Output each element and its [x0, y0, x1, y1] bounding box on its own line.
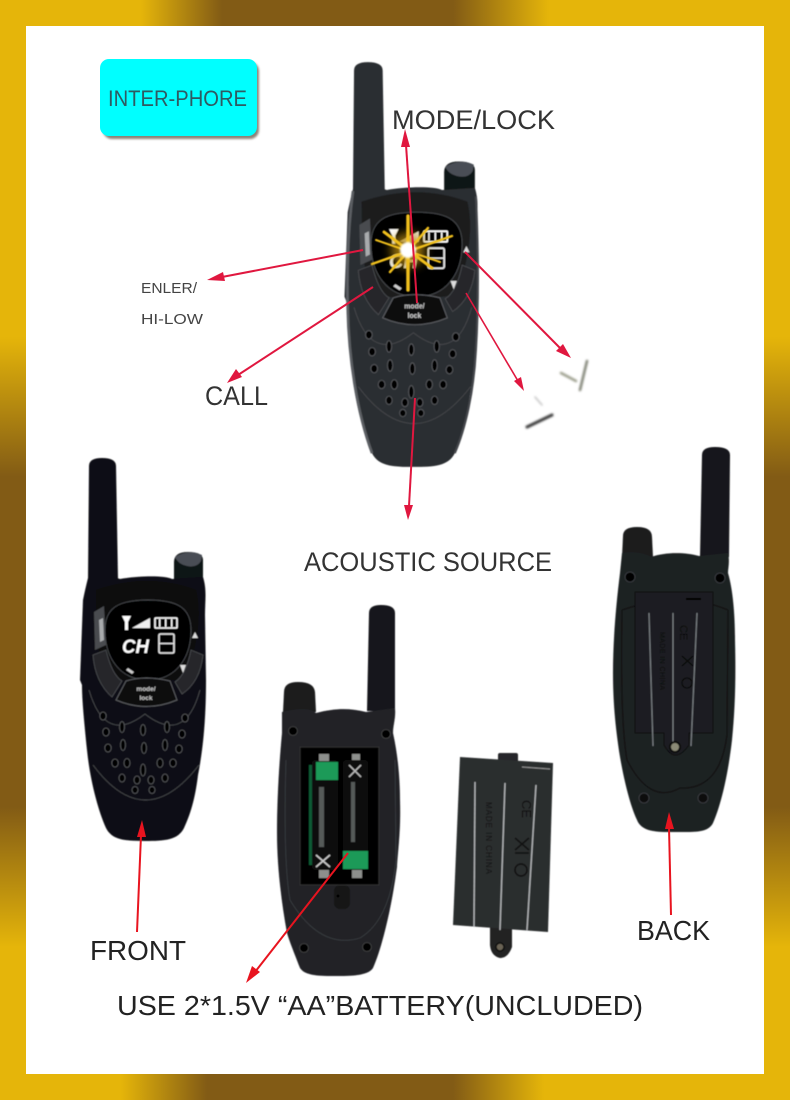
walkie-talkie: lower-left front view — [80, 458, 206, 841]
arrow: to ENLER/HI-LOW — [207, 250, 363, 281]
walkie-talkie: back view: CE — [677, 625, 689, 640]
battery compartment — [300, 747, 379, 885]
arrow: to battery — [246, 853, 348, 983]
arrow: to upper-right button label — [465, 252, 571, 358]
arrow: to CALL — [227, 287, 373, 383]
erased label remnants — [527, 361, 587, 427]
walkie-talkie: open battery compartment view — [277, 605, 400, 976]
label: ENLER/HI-LOW: HI-LOW — [141, 311, 204, 328]
label: battery note: USE 2*1.5V “AA”BATTERY(UNCLUDED) — [117, 990, 643, 1021]
walkie-talkie: back view: MADE IN CHINA — [658, 632, 665, 690]
walkie-talkie: top front view with callouts: mode/ — [404, 303, 425, 310]
arrow: to MODE/LOCK — [401, 129, 417, 303]
walkie-talkie: lower-left front view: lock — [139, 695, 153, 702]
badge: INTER-PHORE: INTER-PHORE — [108, 86, 247, 111]
label: CALL: CALL — [205, 381, 268, 411]
arrow: to lower-right button label — [466, 293, 524, 391]
arrow: to FRONT — [137, 820, 146, 932]
badge: INTER-PHORE — [100, 59, 259, 139]
label: BACK: BACK — [637, 915, 710, 946]
battery door: CE — [519, 800, 534, 818]
battery door — [453, 753, 553, 958]
walkie-talkie: top front view with callouts: CH — [389, 251, 418, 273]
walkie-talkie: back view — [613, 447, 735, 832]
walkie-talkie: lower-left front view: CH — [122, 637, 150, 658]
icon: yellow flash glare on screen — [372, 216, 452, 290]
walkie-talkie: top front view with callouts: lock — [408, 313, 422, 320]
label: ENLER/HI-LOW — [141, 280, 204, 328]
walkie-talkie: lower-left front view: mode/ — [136, 686, 156, 693]
label: ACOUSTIC SOURCE: ACOUSTIC SOURCE — [304, 547, 552, 577]
label: FRONT: FRONT — [90, 935, 186, 966]
label: ENLER/HI-LOW: ENLER/ — [141, 280, 198, 297]
arrow: to ACOUSTIC SOURCE — [404, 398, 415, 520]
arrow: to BACK — [665, 812, 674, 915]
label: MODE/LOCK: MODE/LOCK — [392, 105, 555, 135]
battery door: MADE IN CHINA — [484, 802, 493, 875]
walkie-talkie: top front view with callouts — [344, 62, 478, 467]
